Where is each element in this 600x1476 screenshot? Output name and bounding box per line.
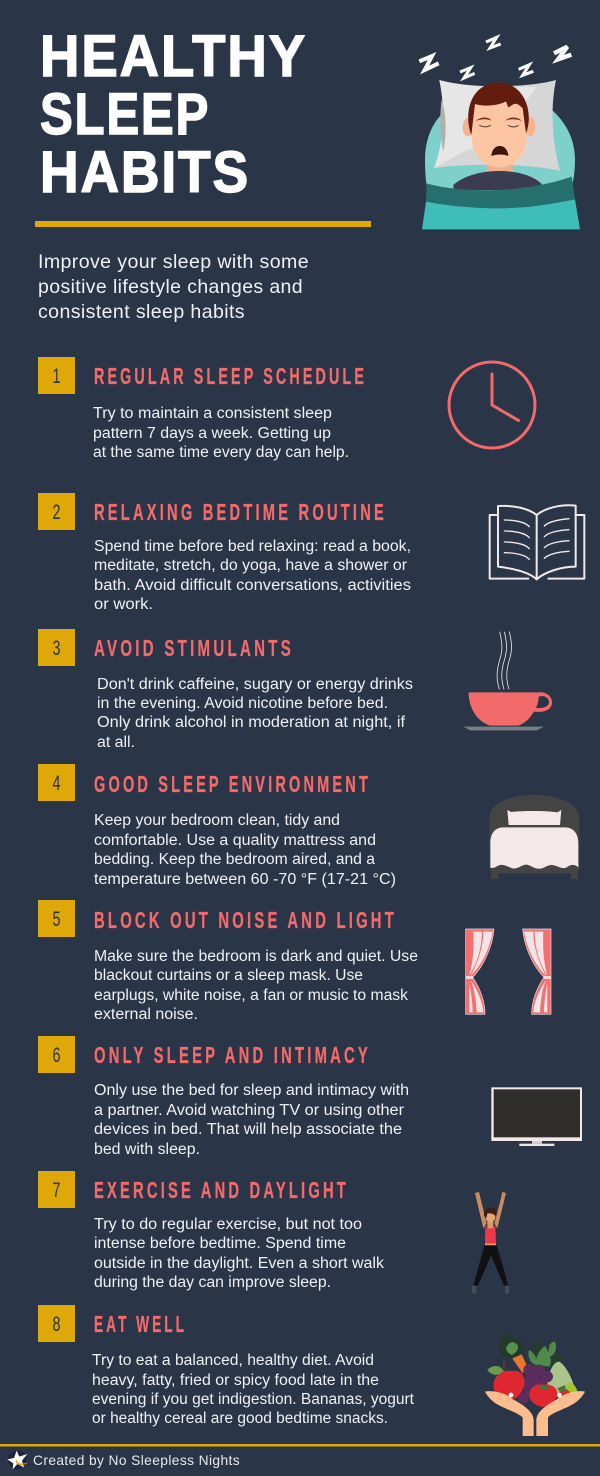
heading 7: EXERCISE AND DAYLIGHT	[94, 1177, 349, 1203]
body 5: blackout curtains or a sleep mask. Use	[94, 967, 363, 984]
section 6	[38, 1036, 409, 1158]
number 8: 8	[52, 1313, 60, 1336]
body 7: outside in the daylight. Even a short walk	[94, 1255, 384, 1272]
title: SLEEP	[40, 82, 210, 147]
section 1	[38, 357, 367, 461]
subtitle	[38, 251, 309, 323]
icon: exercising woman	[472, 1192, 509, 1294]
body 5: Make sure the bedroom is dark and quiet. Use	[94, 948, 418, 965]
number 3: 3	[52, 637, 60, 660]
icon: hands holding fruit	[485, 1333, 585, 1436]
body 3: Don't drink caffeine, sugary or energy drinks	[97, 676, 413, 693]
body 4: bedding. Keep the bedroom aired, and a	[94, 851, 375, 868]
icon: bed	[489, 795, 579, 879]
number 5: 5	[52, 908, 60, 931]
body 1: Try to maintain a consistent sleep	[93, 405, 332, 422]
body 6	[94, 1082, 409, 1158]
icon: clock	[449, 362, 535, 448]
body 7	[94, 1216, 384, 1291]
body 6: Only use the bed for sleep and intimacy with	[94, 1082, 409, 1099]
body 8: or healthy cereal are good bedtime snacks.	[92, 1410, 388, 1427]
heading 6: ONLY SLEEP AND INTIMACY	[94, 1042, 371, 1068]
body 1	[93, 405, 349, 461]
number 6: 6	[52, 1044, 60, 1067]
number badge 1	[38, 357, 75, 394]
title underline	[35, 221, 371, 227]
body 5	[94, 948, 418, 1023]
body 1: pattern 7 days a week. Getting up	[93, 425, 331, 442]
section 4	[38, 764, 396, 888]
number 7: 7	[52, 1179, 60, 1202]
icon: open book	[490, 505, 584, 579]
subtitle: positive lifestyle changes and	[38, 276, 303, 298]
body 2: meditate, stretch, do yoga, have a shower or	[94, 557, 407, 574]
number badge 5	[38, 900, 75, 937]
body 2	[94, 538, 411, 613]
body 2: or work.	[94, 596, 153, 613]
footer credit: Created by No Sleepless Nights	[33, 1452, 240, 1468]
body 1: at the same time every day can help.	[93, 444, 349, 461]
heading 8: EAT WELL	[94, 1311, 187, 1337]
number badge 2	[38, 493, 75, 530]
heading 2: RELAXING BEDTIME ROUTINE	[94, 499, 387, 525]
heading 3: AVOID STIMULANTS	[94, 635, 294, 661]
number 4: 4	[52, 772, 61, 795]
body 2: Spend time before bed relaxing: read a book,	[94, 538, 411, 555]
section 5	[38, 900, 418, 1023]
number 2: 2	[52, 501, 60, 524]
number badge 7	[38, 1171, 75, 1208]
heading 5: BLOCK OUT NOISE AND LIGHT	[94, 907, 397, 933]
number badge 3	[38, 629, 75, 666]
body 8: evening if you get indigestion. Bananas, yogurt	[92, 1391, 415, 1408]
icon: curtains	[466, 929, 551, 1014]
title: HEALTHY	[40, 24, 307, 89]
subtitle: Improve your sleep with some	[38, 251, 309, 273]
body 8	[92, 1352, 415, 1427]
section 7	[38, 1171, 384, 1291]
body 6: devices in bed. That will help associate the	[94, 1121, 402, 1138]
number badge 4	[38, 764, 75, 801]
body 7: Try to do regular exercise, but not too	[94, 1216, 362, 1233]
body 7: intense before bedtime. Spend time	[94, 1235, 346, 1252]
icon: steaming cup	[463, 632, 552, 730]
subtitle: consistent sleep habits	[38, 301, 245, 323]
icon: television	[491, 1087, 582, 1146]
icon: sleeping man	[419, 37, 580, 229]
body 8: heavy, fatty, fried or spicy food late in the	[92, 1372, 379, 1389]
body 6: bed with sleep.	[94, 1141, 200, 1158]
body 5: external noise.	[94, 1006, 198, 1023]
body 4: Keep your bedroom clean, tidy and	[94, 812, 340, 829]
body 5: earplugs, white noise, a fan or music to mask	[94, 987, 408, 1004]
body 6: a partner. Avoid watching TV or using other	[94, 1102, 404, 1119]
heading 4: GOOD SLEEP ENVIRONMENT	[94, 771, 371, 797]
title	[40, 24, 307, 205]
number badge 8	[38, 1305, 75, 1342]
body 7: during the day can improve sleep.	[94, 1274, 331, 1291]
title: HABITS	[40, 140, 250, 205]
footer rule	[0, 1444, 600, 1446]
body 4: temperature between 60 -70 °F (17-21 °C)	[94, 871, 396, 888]
section 2	[38, 493, 411, 613]
number 1: 1	[52, 365, 60, 388]
section 8	[38, 1305, 415, 1427]
body 8: Try to eat a balanced, healthy diet. Avoid	[92, 1352, 374, 1369]
heading 1: REGULAR SLEEP SCHEDULE	[94, 363, 367, 389]
footer logo	[7, 1451, 28, 1469]
body 3: at all.	[97, 734, 135, 751]
body 3	[97, 676, 413, 751]
body 3: in the evening. Avoid nicotine before bed.	[97, 695, 388, 712]
body 4	[94, 812, 396, 888]
number badge 6	[38, 1036, 75, 1073]
section 3	[38, 629, 413, 751]
body 2: bath. Avoid difficult conversations, activities	[94, 577, 411, 594]
body 3: Only drink alcohol in moderation at night, if	[97, 714, 406, 731]
body 4: comfortable. Use a quality mattress and	[94, 832, 376, 849]
